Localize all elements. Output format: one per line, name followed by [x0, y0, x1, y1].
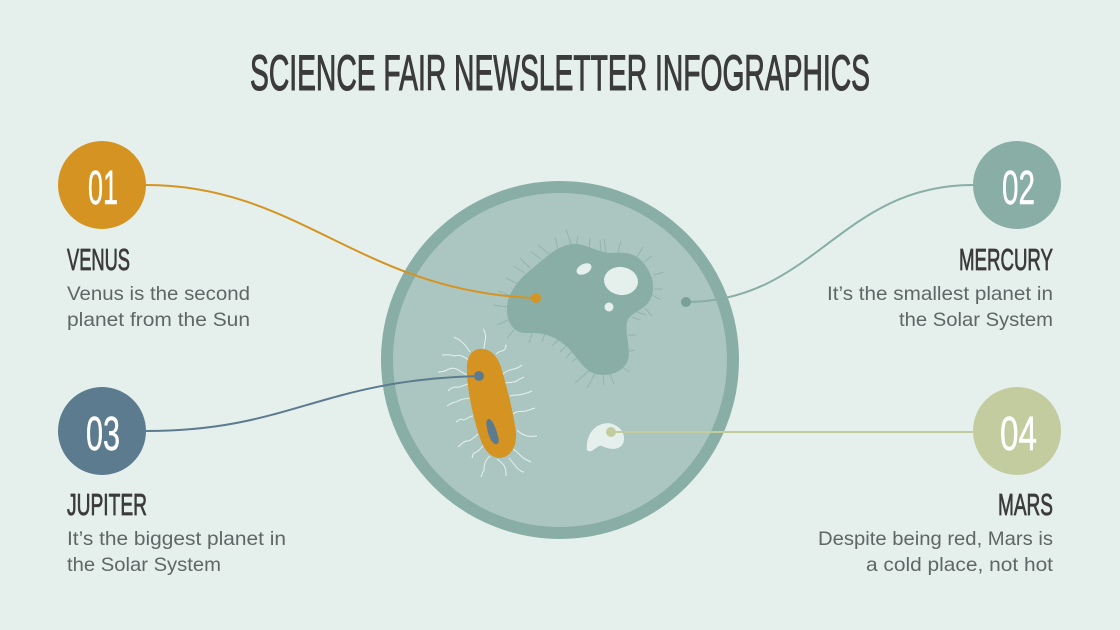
heading Jupiter: JUPITER: [67, 487, 147, 522]
badge 02: 02: [1002, 162, 1035, 215]
text Jupiter: the Solar System: [67, 554, 221, 576]
text Jupiter: It’s the biggest planet in: [67, 528, 286, 550]
text Mars: [818, 528, 1054, 576]
central petri dish: [387, 187, 733, 533]
badge 01: 01: [88, 162, 118, 215]
item 03 Jupiter: [58, 387, 286, 576]
connector: 01 Venus: [146, 185, 541, 303]
amoeba vacuoles: [575, 261, 640, 312]
badge 04: [973, 387, 1061, 475]
bacterium nucleus: [486, 419, 499, 444]
text Mars: Despite being red, Mars is: [818, 528, 1053, 550]
connector: 03 Jupiter: [146, 371, 484, 431]
connector: 02 Mercury: [681, 185, 973, 307]
connector: 04 Mars: [606, 427, 973, 437]
item 01 Venus: [58, 141, 250, 331]
text Mars: a cold place, not hot: [866, 554, 1054, 576]
text Jupiter: [67, 528, 286, 576]
text Mercury: the Solar System: [899, 309, 1053, 331]
amoeba microbe: [493, 229, 664, 388]
badge 03: [58, 387, 146, 475]
badge 04: 04: [1000, 408, 1037, 461]
badge 02: [973, 141, 1061, 229]
item 04 Mars: [818, 387, 1061, 576]
text Mercury: It’s the smallest planet in: [827, 283, 1053, 305]
bacterium microbe: [438, 329, 537, 477]
badge 03: 03: [86, 408, 120, 461]
text Mercury: [827, 283, 1053, 331]
item 02 Mercury: [827, 141, 1061, 331]
text Venus: Venus is the second: [67, 283, 250, 305]
text Venus: planet from the Sun: [67, 309, 250, 331]
badge 01: [58, 141, 146, 229]
text Venus: [67, 283, 250, 331]
heading Mars: MARS: [998, 487, 1053, 522]
heading Venus: VENUS: [67, 242, 130, 277]
heading Mercury: MERCURY: [959, 242, 1053, 277]
white comma microbe: [587, 423, 624, 451]
